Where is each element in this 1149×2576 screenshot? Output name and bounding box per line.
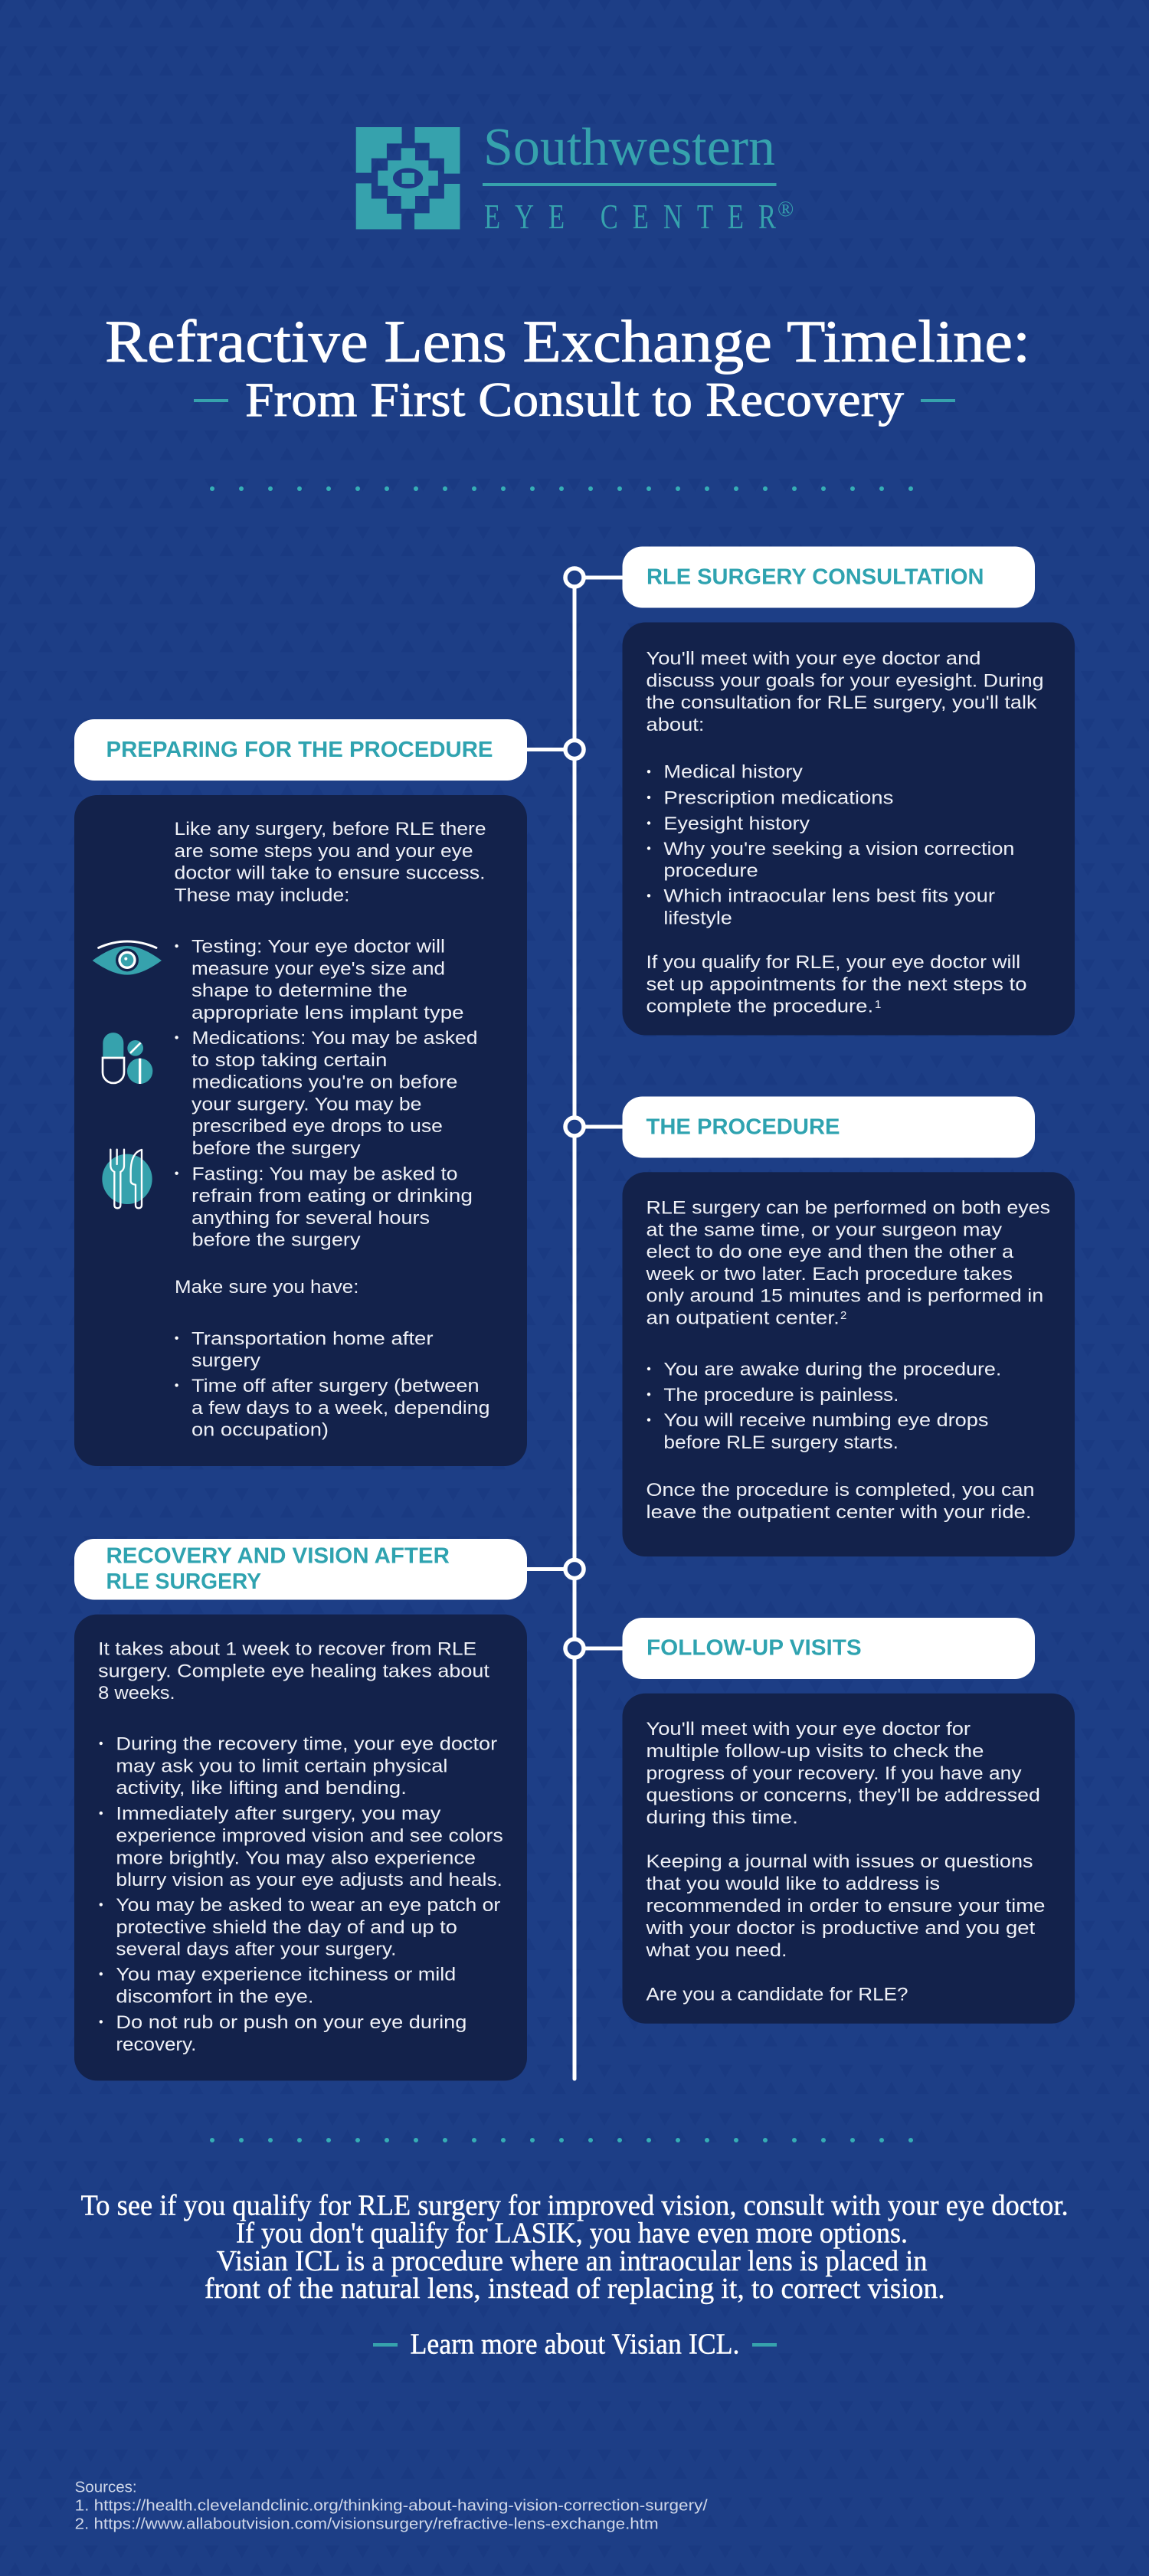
closing text: leave the outpatient center with your ride.	[647, 1502, 1031, 1523]
bullet list: Why you're seeking a vision correction	[663, 839, 1014, 859]
panel: the procedure	[622, 1097, 1075, 1556]
timeline spine with nodes	[525, 568, 624, 2079]
closing text: 1	[875, 998, 881, 1011]
intro text: an outpatient center.	[647, 1308, 840, 1328]
intro text: You'll meet with your eye doctor and	[647, 648, 980, 669]
paragraph two: that you would like to address is	[647, 1874, 940, 1894]
make sure you have: Time off after surgery (between	[192, 1376, 480, 1396]
logo subtitle: EYE CENTER	[484, 197, 777, 236]
heading pill	[622, 1097, 1035, 1158]
bullet list: steps: Testing: Your eye doctor will	[192, 937, 445, 957]
bullet list: steps	[175, 937, 477, 1251]
intro text	[647, 648, 1043, 735]
paragraph one	[647, 1719, 1040, 1828]
body card	[622, 622, 1075, 1036]
bullet list: steps: shape to determine the	[192, 980, 408, 1001]
bullet list: steps: medications you're on before	[192, 1072, 458, 1093]
closing call to action text: To see if you qualify for RLE surgery for improved vision, consult with your eye doctor.	[81, 2190, 1069, 2222]
bullet list: Immediately after surgery, you may	[116, 1804, 440, 1825]
heading pill: THE PROCEDURE	[647, 1115, 840, 1140]
heading pill	[622, 1618, 1035, 1679]
icon: logo mark	[356, 127, 460, 229]
bullet list: several days after your surgery.	[116, 1939, 396, 1960]
sources: Sources:	[75, 2479, 137, 2496]
bullet list	[647, 762, 1014, 928]
bullet list: steps: your surgery. You may be	[192, 1094, 421, 1115]
closing call to action text: If you don't qualify for LASIK, you have even more options.	[236, 2218, 908, 2250]
logo: Southwestern Eye Center: ®	[777, 198, 794, 221]
closing text: If you qualify for RLE, your eye doctor will	[647, 952, 1020, 973]
intro text: surgery. Complete eye healing takes about	[98, 1661, 489, 1681]
bullet list: Eyesight history	[663, 813, 810, 834]
intro text: at the same time, or your surgeon may	[647, 1219, 1002, 1240]
make sure you have: surgery	[192, 1350, 260, 1371]
bullet list: discomfort in the eye.	[116, 1986, 313, 2007]
bullet list: steps: to stop taking certain	[192, 1050, 387, 1071]
heading pill: RLE SURGERY CONSULTATION	[647, 565, 984, 589]
bullet list: You are awake during the procedure.	[663, 1360, 1001, 1380]
sources: 1. https://health.clevelandclinic.org/thinking-about-having-vision-correction-surgery/	[75, 2497, 708, 2514]
make sure you have: a few days to a week, depending	[192, 1398, 490, 1419]
bullet list: Which intraocular lens best fits your	[663, 886, 995, 907]
bullet list: You will receive numbing eye drops	[663, 1410, 988, 1431]
learn more link: Learn more about Visian ICL.	[411, 2329, 740, 2361]
panel: RLE surgery consultation	[622, 547, 1075, 1036]
bullet list: steps: appropriate lens implant type	[192, 1003, 464, 1023]
dotted divider: top	[210, 486, 913, 491]
intro text: elect to do one eye and then the other a	[647, 1242, 1014, 1262]
bullet list: steps: anything for several hours	[192, 1208, 430, 1229]
intro text: Like any surgery, before RLE there	[175, 819, 486, 840]
panel: preparing for the procedure	[74, 719, 527, 1466]
intro text	[645, 1198, 1050, 1328]
closing text	[647, 1480, 1034, 1523]
bullet list: steps: prescribed eye drops to use	[192, 1116, 443, 1137]
make sure you have: Transportation home after	[192, 1328, 434, 1349]
bullet list: Prescription medications	[663, 787, 893, 808]
paragraph one: questions or concerns, they'll be addressed	[647, 1786, 1040, 1806]
bullet list: recovery.	[116, 2034, 196, 2055]
closing call to action text: Visian ICL is a procedure where an intraocular lens is placed in	[217, 2245, 928, 2277]
closing text: set up appointments for the next steps to	[647, 974, 1026, 995]
bullet list: Medical history	[663, 762, 803, 783]
closing text: Once the procedure is completed, you can	[647, 1480, 1034, 1501]
intro text: 2	[840, 1309, 846, 1322]
logo: Southwestern Eye Center	[356, 118, 794, 236]
bullet list: Do not rub or push on your eye during	[116, 2012, 466, 2033]
paragraph one: during this time.	[647, 1808, 798, 1828]
body card	[74, 1615, 527, 2080]
intro text: discuss your goals for your eyesight. During	[647, 670, 1043, 691]
heading pill	[74, 719, 527, 781]
body card	[622, 1172, 1075, 1556]
bullet list: protective shield the day of and up to	[116, 1917, 457, 1938]
bullet list: before RLE surgery starts.	[663, 1432, 899, 1453]
bullet list: lifestyle	[663, 908, 732, 928]
panel: follow-up visits	[622, 1618, 1075, 2024]
panel: recovery and vision after RLE surgery	[74, 1539, 527, 2080]
heading pill: RLE SURGERY	[106, 1569, 261, 1594]
intro text: week or two later. Each procedure takes	[645, 1264, 1013, 1285]
bullet list: blurry vision as your eye adjusts and heals.	[116, 1870, 502, 1890]
paragraph one: You'll meet with your eye doctor for	[647, 1719, 971, 1740]
bullet list: steps: Medications: You may be asked	[192, 1028, 478, 1049]
icon: eye	[93, 941, 162, 975]
bullet list: During the recovery time, your eye doctor	[116, 1734, 497, 1755]
intro text: about:	[647, 715, 705, 735]
bullet list: steps: before the surgery	[192, 1230, 360, 1251]
bullet list: may ask you to limit certain physical	[116, 1756, 447, 1776]
title: From First Consult to Recovery	[245, 372, 904, 427]
intro text	[98, 1639, 489, 1704]
bullet list: The procedure is painless.	[663, 1385, 899, 1406]
bullet list: You may experience itchiness or mild	[116, 1965, 456, 1985]
intro text: RLE surgery can be performed on both eyes	[647, 1198, 1050, 1218]
closing question: Are you a candidate for RLE?	[647, 1984, 908, 2005]
heading pill: RECOVERY AND VISION AFTER	[106, 1544, 450, 1569]
bullet list: experience improved vision and see colors	[116, 1826, 503, 1846]
bullet list: steps: refrain from eating or drinking	[192, 1186, 473, 1206]
body card	[622, 1694, 1075, 2024]
bullet list: You may be asked to wear an eye patch or	[116, 1895, 500, 1916]
intro text: doctor will take to ensure success.	[175, 863, 486, 884]
intro text	[175, 819, 486, 905]
make sure you have: Make sure you have:	[175, 1277, 358, 1298]
bullet list: more brightly. You may also experience	[116, 1848, 476, 1868]
heading pill	[74, 1539, 527, 1599]
make sure you have: on occupation)	[192, 1420, 329, 1441]
sources	[75, 2479, 708, 2532]
dotted divider: bottom	[210, 2138, 913, 2142]
paragraph two: with your doctor is productive and you get	[645, 1918, 1036, 1939]
body card	[74, 795, 527, 1466]
icon: pills	[103, 1033, 152, 1084]
intro text: These may include:	[175, 885, 349, 905]
intro text: are some steps you and your eye	[175, 841, 473, 862]
bullet list: steps: Fasting: You may be asked to	[192, 1164, 458, 1184]
intro text: 8 weeks.	[98, 1683, 175, 1704]
closing text: complete the procedure.	[647, 997, 873, 1017]
bullet list: steps: measure your eye's size and	[192, 958, 445, 979]
paragraph one: progress of your recovery. If you have any	[647, 1763, 1022, 1784]
closing call to action text	[81, 2190, 1069, 2305]
bullet list: procedure	[663, 861, 758, 882]
closing text	[647, 952, 1026, 1017]
paragraph two: Keeping a journal with issues or questions	[647, 1851, 1033, 1872]
heading pill: PREPARING FOR THE PROCEDURE	[106, 738, 493, 762]
heading pill: FOLLOW-UP VISITS	[647, 1635, 862, 1660]
bullet list	[100, 1734, 503, 2055]
intro text: only around 15 minutes and is performed in	[647, 1286, 1043, 1307]
logo wordmark: Southwestern	[483, 118, 775, 177]
intro text: the consultation for RLE surgery, you'll talk	[647, 692, 1038, 713]
bullet list: steps: before the surgery	[192, 1138, 360, 1159]
make sure you have	[175, 1277, 490, 1441]
bullet list	[647, 1360, 1001, 1453]
title	[105, 308, 1030, 427]
intro text: It takes about 1 week to recover from RLE	[98, 1639, 476, 1659]
paragraph two: what you need.	[645, 1940, 787, 1961]
title: Refractive Lens Exchange Timeline:	[105, 308, 1030, 375]
paragraph one: multiple follow-up visits to check the	[647, 1741, 984, 1762]
icon: fork and knife	[102, 1150, 152, 1208]
paragraph two	[645, 1851, 1045, 1961]
closing call to action text: front of the natural lens, instead of replacing it, to correct vision.	[205, 2273, 945, 2305]
sources: 2. https://www.allaboutvision.com/visionsurgery/refractive-lens-exchange.htm	[75, 2515, 659, 2532]
bullet list: activity, like lifting and bending.	[116, 1778, 407, 1799]
heading pill	[622, 547, 1035, 608]
paragraph two: recommended in order to ensure your time	[647, 1896, 1045, 1916]
